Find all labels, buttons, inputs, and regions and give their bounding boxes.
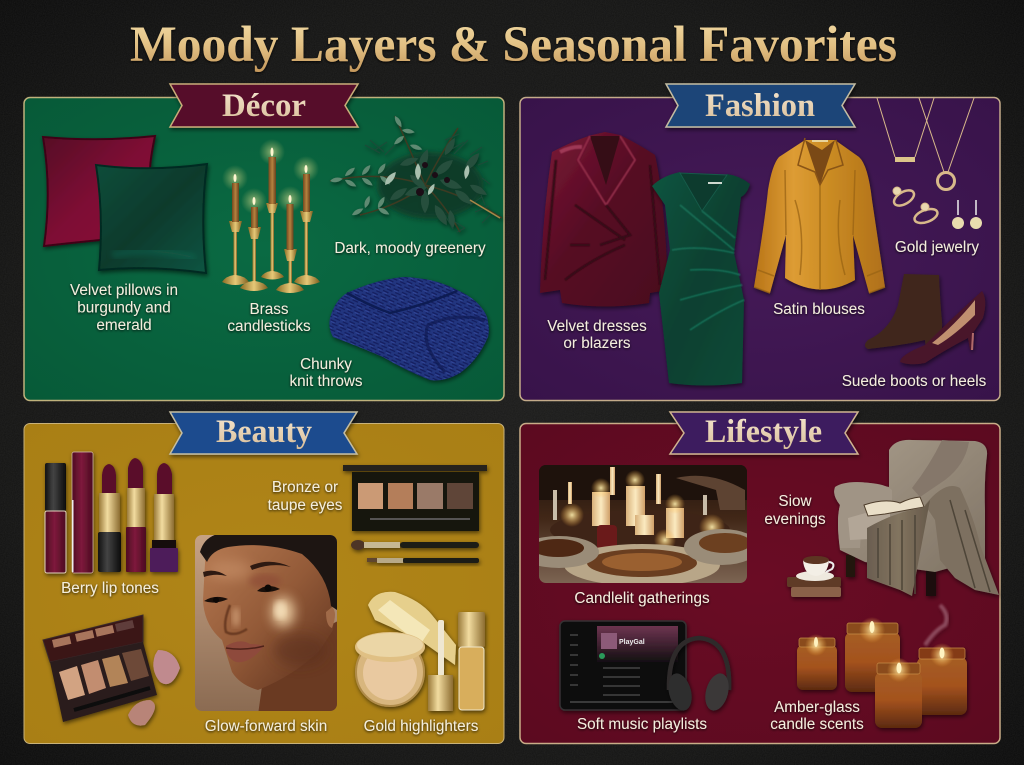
label: soft music: Soft music playlists	[577, 716, 707, 733]
label: knit throws: Chunky	[300, 356, 352, 373]
ribbon heading: Décor	[170, 84, 358, 127]
label: candlelit gatherings: Candlelit gatherings	[574, 590, 710, 607]
labels: beauty	[61, 479, 479, 735]
label: slow evenings: Siow	[778, 493, 813, 510]
label: velvet pillows: Velvet pillows in	[70, 282, 178, 299]
label: velvet pillows: emerald	[96, 317, 152, 334]
image: portrait with glowing skin	[195, 532, 340, 715]
icon: tablet with music playlist	[560, 621, 686, 710]
label: velvet dresses: Velvet dresses	[547, 318, 647, 335]
ribbon heading: Lifestyle: Lifestyle	[705, 414, 822, 450]
icon: amber glass candles	[797, 605, 967, 728]
panel: Lifestyle	[519, 412, 1000, 744]
label: bronze eyes: Bronze or	[272, 479, 338, 496]
icon: suede boots and heels	[865, 274, 985, 364]
icon: eyeshadow palette with lid	[43, 615, 180, 726]
label: berry lips: Berry lip tones	[61, 580, 159, 597]
ribbon heading: Beauty	[170, 412, 357, 454]
label: satin blouses: Satin blouses	[773, 301, 865, 318]
icon: satin blouse	[754, 138, 885, 293]
icon: makeup brushes	[351, 540, 479, 563]
labels: décor	[70, 240, 486, 390]
icon: gold jewelry	[877, 98, 982, 229]
icon: berry lip products	[45, 452, 178, 573]
icon: coffee cup on books	[787, 556, 841, 597]
label: brass candlesticks: Brass	[249, 301, 289, 318]
label: amber candles: candle scents	[770, 716, 864, 733]
title: Moody Layers & Seasonal Favorites	[130, 17, 897, 73]
ribbon heading: Fashion	[666, 84, 855, 127]
panel: Décor	[24, 84, 504, 400]
icon: velvet blazer	[540, 132, 668, 306]
label: amber candles: Amber-glass	[774, 699, 860, 716]
icon: velvet pillows	[43, 136, 207, 273]
label: gold highlighters: Gold highlighters	[364, 718, 479, 735]
label: velvet pillows: burgundy and	[77, 300, 171, 316]
labels: lifestyle	[574, 493, 864, 733]
label: velvet dresses: or blazers	[563, 335, 631, 352]
icon: headphones	[664, 638, 733, 713]
ribbon heading: Fashion: Fashion	[705, 88, 815, 124]
label: slow evenings: evenings	[764, 511, 826, 528]
icon: velvet dress	[652, 172, 750, 386]
label: glow skin: Glow-forward skin	[205, 718, 327, 735]
label: bronze eyes: taupe eyes	[268, 497, 343, 514]
icon: brass candlesticks	[222, 139, 320, 293]
labels: fashion	[547, 239, 987, 390]
ribbon heading: Beauty: Beauty	[216, 414, 312, 450]
icon: tablet with music playlist: PlayGal	[619, 639, 645, 646]
label: suede boots: Suede boots or heels	[842, 373, 987, 390]
icon: chunky knit throw	[329, 277, 489, 380]
icon: gold highlighters	[355, 592, 485, 711]
label: greenery: Dark, moody greenery	[334, 240, 486, 257]
panel: Beauty	[24, 412, 504, 744]
label: brass candlesticks: candlesticks	[227, 318, 311, 335]
icon: bronze taupe eyeshadow palette	[343, 465, 487, 531]
ribbon heading: Lifestyle	[670, 412, 858, 454]
panel: Fashion	[520, 84, 1000, 400]
ribbon heading: Décor: Décor	[222, 88, 306, 124]
label: knit throws: knit throws	[289, 373, 363, 390]
image: candlelit table	[539, 465, 747, 583]
icon: armchair with throw	[834, 440, 999, 596]
icon: dark greenery	[330, 115, 502, 232]
label: gold jewelry: Gold jewelry	[895, 239, 979, 256]
